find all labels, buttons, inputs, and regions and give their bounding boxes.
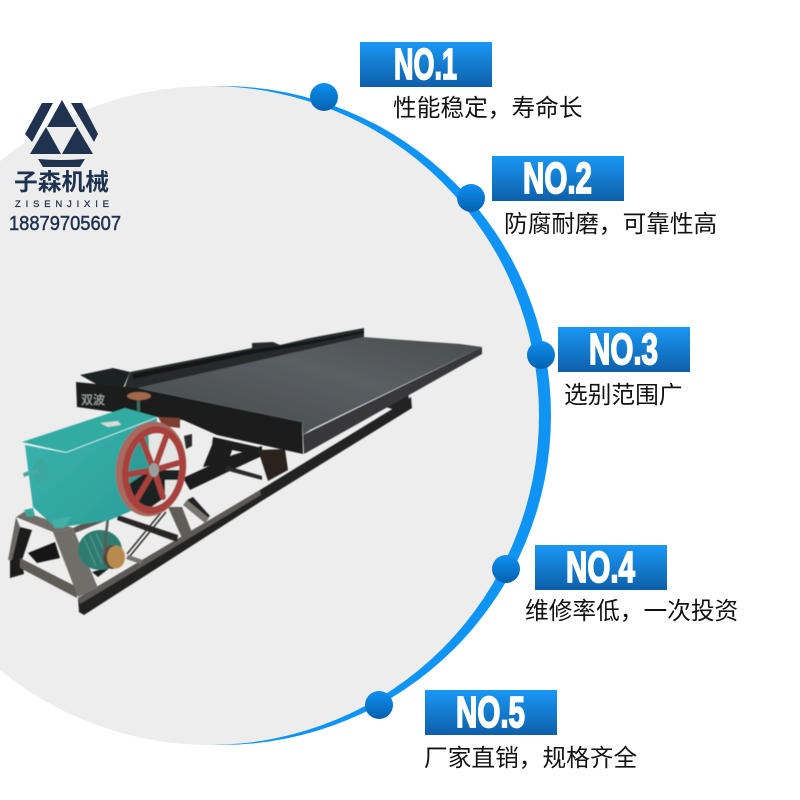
- motor: [78, 530, 125, 577]
- dot 4: [492, 555, 520, 583]
- gray circle background: [0, 86, 539, 745]
- badge NO.4: [535, 545, 667, 590]
- item 5: [365, 688, 638, 772]
- gearbox: [22, 408, 157, 528]
- shaking table machine: [8, 328, 482, 615]
- badge NO.1: [360, 42, 492, 87]
- blue arc ring: [0, 86, 551, 745]
- description 5: 厂家直销，规格齐全: [424, 745, 638, 772]
- table deck surface: [137, 337, 482, 435]
- badge NO.3: [558, 327, 690, 372]
- company pinyin: ZISENJIXIE: [15, 199, 109, 210]
- rear supports: [183, 394, 410, 523]
- item 1: [310, 40, 583, 122]
- dot 2: [457, 184, 485, 212]
- description 2: 防腐耐磨，可靠性高: [504, 211, 717, 238]
- drive belts: [104, 455, 166, 556]
- item 4: [492, 543, 738, 625]
- item 2: [457, 154, 717, 238]
- hand wheel: [127, 392, 151, 412]
- item 3: [527, 325, 690, 409]
- dot 3: [527, 341, 555, 369]
- side label on table: 双波: [81, 393, 105, 407]
- badge label 4: NO.4: [566, 543, 635, 592]
- badge NO.2: [492, 156, 624, 201]
- description 3: 选别范围广: [564, 382, 682, 409]
- pulley wheel: [114, 421, 187, 517]
- dot 5: [365, 691, 393, 719]
- badge label 1: NO.1: [394, 40, 457, 89]
- logo: [9, 100, 121, 235]
- lower long beam: [78, 397, 412, 615]
- table end and side face: [76, 347, 482, 454]
- base frame: [8, 507, 193, 598]
- badge label 2: NO.2: [523, 154, 592, 203]
- company name: 子森机械: [14, 169, 109, 195]
- back rail: [80, 328, 364, 392]
- logo mark: [25, 100, 98, 167]
- badge label 3: NO.3: [589, 325, 658, 374]
- badge NO.5: [425, 690, 557, 735]
- dot 1: [310, 83, 338, 111]
- description 4: 维修率低，一次投资: [525, 598, 738, 625]
- description 1: 性能稳定，寿命长: [393, 95, 583, 122]
- badge label 5: NO.5: [456, 688, 525, 737]
- phone number: 18879705607: [9, 213, 121, 235]
